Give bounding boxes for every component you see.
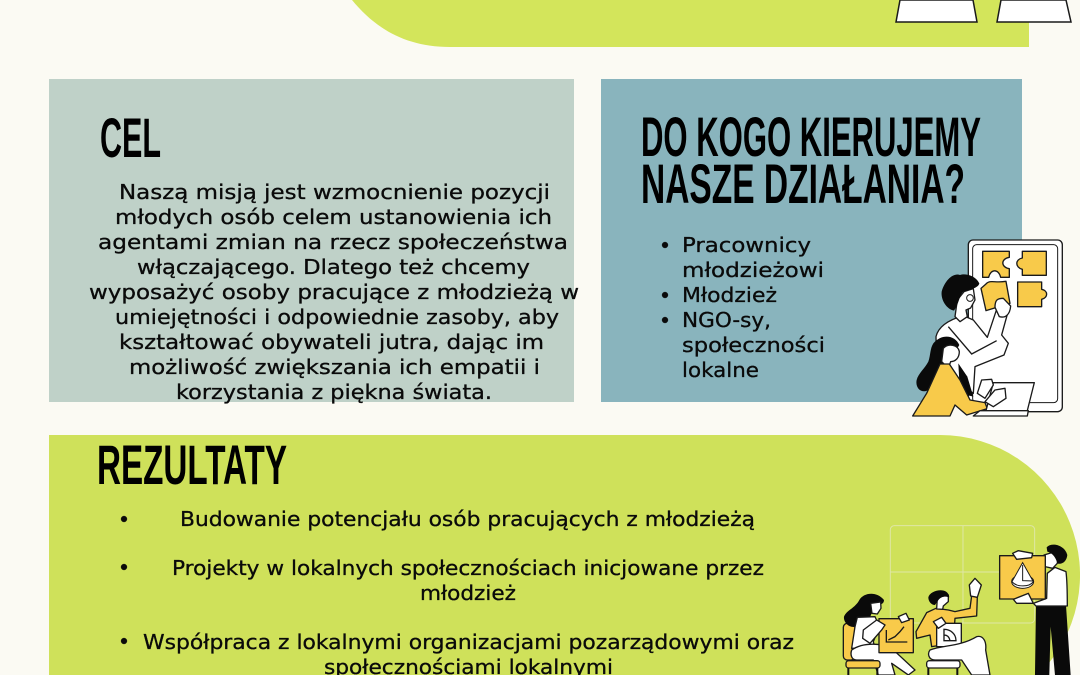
list: target groups: NGO-sy, bbox=[682, 308, 771, 332]
heading: cel: CEL bbox=[100, 106, 161, 169]
panel: rezultaty bbox=[49, 433, 1080, 675]
text block: cel: kształtować obywateli jutra, dając im bbox=[119, 330, 544, 354]
heading: rezultaty: REZULTATY bbox=[97, 433, 287, 496]
icon: team presenting charts bbox=[843, 526, 1071, 675]
heading: do kogo kierujemy bbox=[641, 105, 981, 215]
text block: cel: umiejętności i odpowiednie zasoby, aby bbox=[115, 305, 559, 329]
list: target groups: Pracownicy bbox=[682, 233, 811, 257]
seated man bbox=[916, 596, 977, 647]
list: target groups: lokalne bbox=[682, 358, 759, 382]
text block: cel: młodych osób celem ustanowienia ich bbox=[115, 205, 552, 229]
panel: do kogo kierujemy bbox=[601, 79, 1022, 402]
icon: people solving puzzle on tablet bbox=[913, 240, 1062, 416]
panel: cel bbox=[49, 79, 579, 404]
list: results: Projekty w lokalnych społecznościach inicjowane przez bbox=[172, 556, 764, 580]
list: results bbox=[121, 507, 794, 675]
list: results: młodzież bbox=[420, 581, 516, 605]
seated person bbox=[916, 337, 959, 391]
list: target groups: młodzieżowi bbox=[682, 258, 824, 282]
top green shape bbox=[352, 0, 1071, 47]
text block: cel: możliwość zwiększania ich empatii i bbox=[129, 355, 540, 379]
list: results: Współpraca z lokalnymi organizacjami pozarządowymi oraz bbox=[143, 630, 794, 654]
text block: cel: Naszą misją jest wzmocnienie pozycji bbox=[119, 180, 550, 204]
standing person bbox=[936, 307, 1008, 393]
standing man bbox=[1035, 605, 1071, 675]
list: target groups bbox=[662, 233, 825, 382]
icon: cropped white figures at top bbox=[896, 0, 1071, 22]
text block: cel: włączającego. Dlatego też chcemy bbox=[137, 255, 530, 279]
text block: cel bbox=[89, 180, 579, 404]
text block: cel: korzystania z piękna świata. bbox=[176, 380, 492, 404]
list: results: Budowanie potencjału osób pracujących z młodzieżą bbox=[180, 507, 755, 531]
list: target groups: Młodzież bbox=[682, 283, 777, 307]
text block: cel: agentami zmian na rzecz społeczeństwa bbox=[98, 230, 568, 254]
list: target groups: społeczności bbox=[682, 333, 825, 357]
text block: cel: wyposażyć osoby pracujące z młodzieżą w bbox=[89, 280, 579, 304]
hands and laptop bbox=[986, 383, 1034, 411]
woman with chart bbox=[843, 623, 855, 660]
